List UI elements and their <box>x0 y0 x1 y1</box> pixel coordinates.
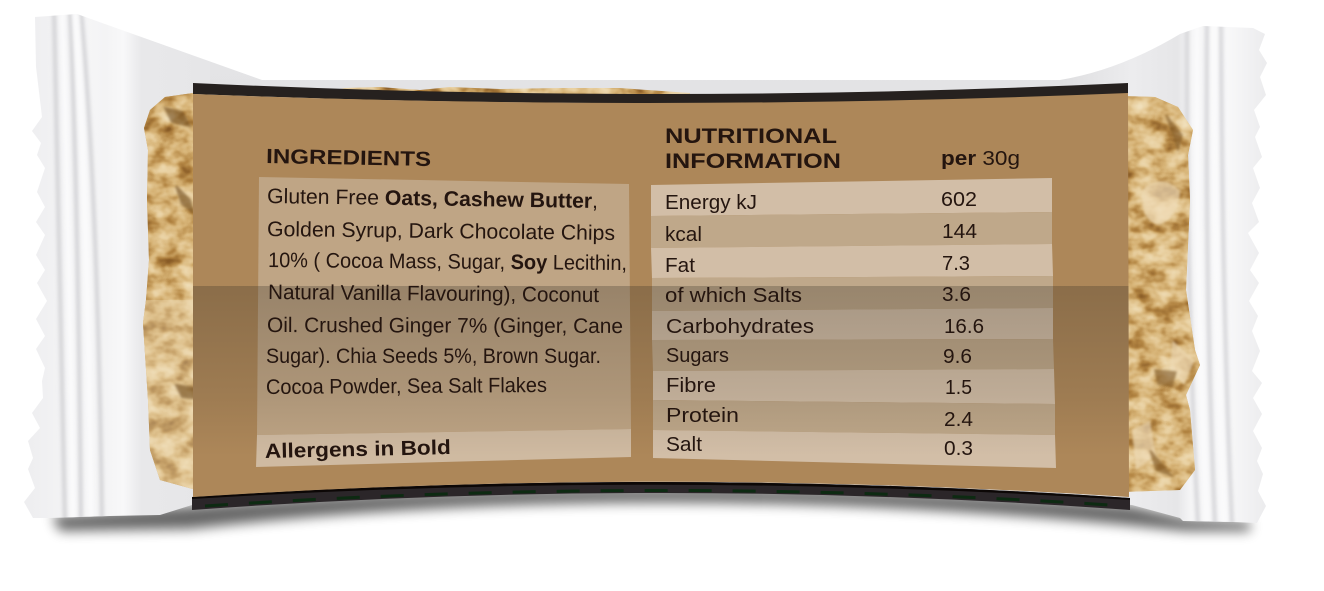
nutrition heading <box>665 124 841 173</box>
fold shadow across label <box>193 286 1129 432</box>
ingredients text: 10% ( Cocoa Mass, Sugar, Soy Lecithin, <box>268 249 627 275</box>
ingredients text: Golden Syrup, Dark Chocolate Chips <box>267 218 615 245</box>
ingredients text <box>266 185 627 399</box>
nutrient values: 7.3 <box>942 252 970 275</box>
nutrient values: 602 <box>941 188 977 211</box>
nutrition heading: INFORMATION <box>665 149 841 173</box>
nutrient values <box>941 188 984 460</box>
ingredients text: Natural Vanilla Flavouring), Coconut <box>268 281 599 307</box>
nutrient values: 0.3 <box>944 437 973 460</box>
nutrient names: Protein <box>666 404 739 427</box>
panel: ingredients background <box>256 177 631 467</box>
oat bar, right end <box>1128 96 1200 492</box>
nutrient values: 9.6 <box>943 345 972 368</box>
ingredients text: Oil. Crushed Ginger 7% (Ginger, Cane <box>267 314 623 338</box>
nutrient names <box>665 191 814 456</box>
nutrient names: Salt <box>666 433 702 456</box>
nutrient values: 144 <box>942 220 977 243</box>
label panel <box>193 93 1129 497</box>
nutrition heading: NUTRITIONAL <box>665 124 837 148</box>
panel: nutrition table background <box>651 178 1056 468</box>
nutrient names: Carbohydrates <box>666 315 814 338</box>
oat bar, left end <box>140 88 200 494</box>
ingredients heading: INGREDIENTS <box>266 145 431 171</box>
oat crumbs above the label <box>320 87 690 100</box>
ingredients text: Sugar). Chia Seeds 5%, Brown Sugar. <box>266 345 601 368</box>
ingredients text: Gluten Free Oats, Cashew Butter, <box>267 185 598 213</box>
wrapper shadow <box>52 488 1250 531</box>
nutrient names: kcal <box>665 223 702 246</box>
nutrient values: 2.4 <box>944 408 973 431</box>
nutrient names: Fibre <box>666 374 716 397</box>
bottom dark band <box>192 482 1130 510</box>
nutrient names: of which Salts <box>665 284 802 307</box>
nutrient values: 16.6 <box>944 315 984 338</box>
per serving heading: per 30g <box>941 147 1020 170</box>
nutrient names: Fat <box>665 254 695 277</box>
top dark band <box>193 83 1128 103</box>
ingredients text: Cocoa Powder, Sea Salt Flakes <box>266 374 547 399</box>
nutrient names: Sugars <box>666 344 729 367</box>
nutrient values: 3.6 <box>942 283 971 306</box>
nutrient names: Energy kJ <box>665 191 757 214</box>
nutrient values: 1.5 <box>945 376 972 399</box>
allergens note: Allergens in Bold <box>265 436 451 463</box>
